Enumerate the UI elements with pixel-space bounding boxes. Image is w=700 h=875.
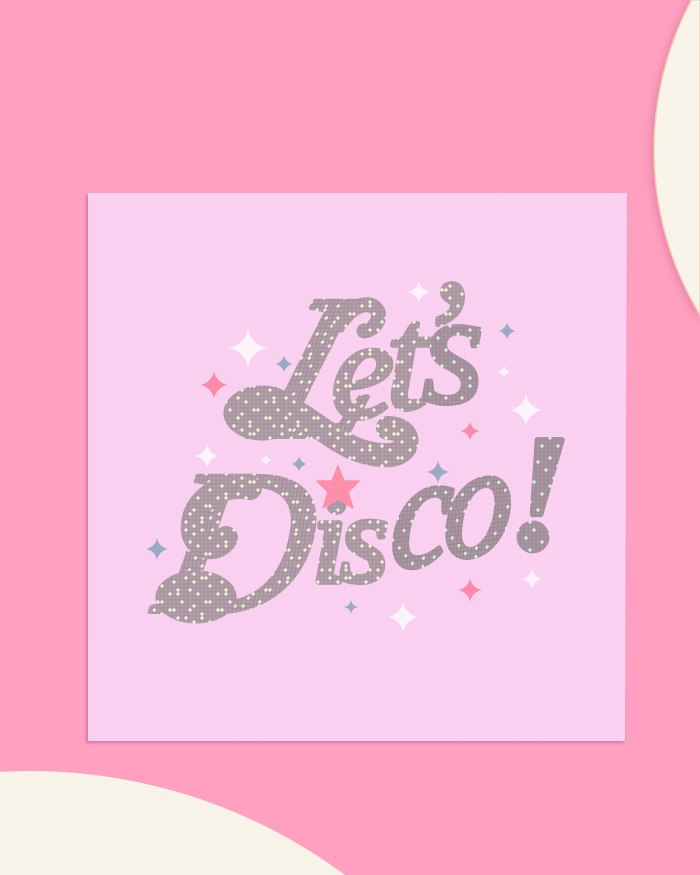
L loop swash [224,386,300,440]
letter e: e [331,290,394,448]
napkin [86,193,627,743]
bottom left cream plate [0,771,345,875]
blue sparkles [146,323,515,614]
letter s: s [340,471,389,609]
letter s: s [422,259,484,437]
letter t: t [386,275,431,441]
exclamation mark: ! [507,401,571,584]
top right cream plate [651,0,700,322]
pink sparkles [201,372,482,602]
L foot swash [296,412,407,455]
letter i: i [312,471,347,609]
white sparkles [195,281,542,632]
lettering: Disco! [141,401,571,658]
letter L: L [233,255,423,481]
D loop swash [156,571,236,623]
D top curl swash [193,487,250,547]
lettering: Let's [224,247,484,481]
apostrophe: ’ [414,247,467,425]
L top hook swash [340,305,379,331]
pink star [317,466,359,508]
letter o: o [440,410,519,594]
letter D: D [141,427,335,658]
letter c: c [387,421,458,604]
